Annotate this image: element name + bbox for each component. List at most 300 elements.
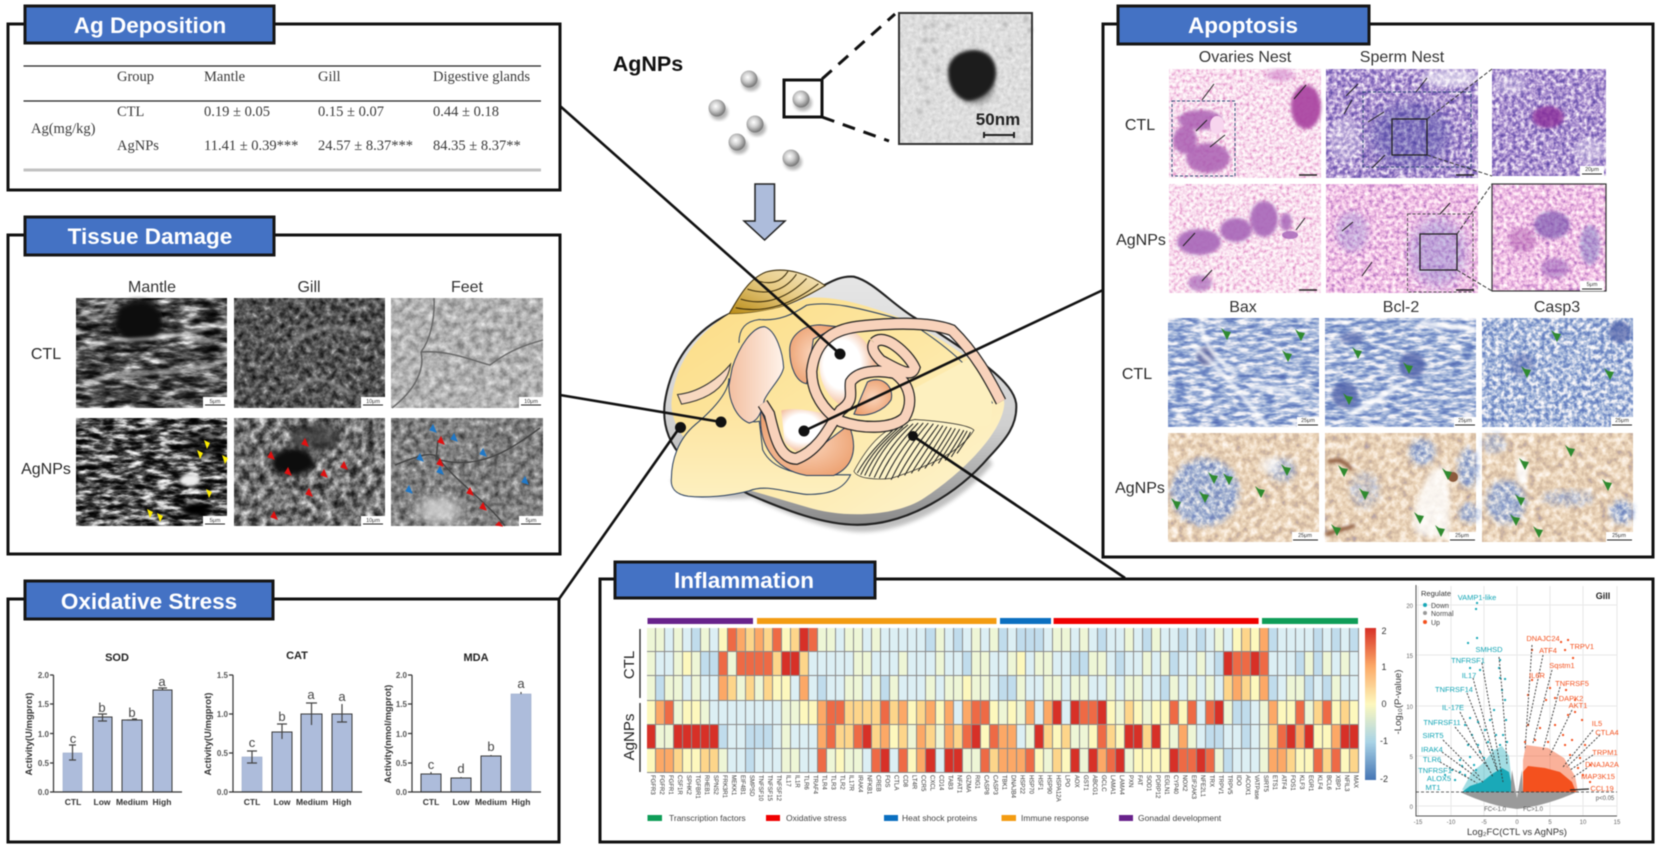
SEM: Gill AgNPs [234,418,385,526]
bar chart: SOD: c [70,731,77,746]
heatmap colour bar: 0 [1381,699,1387,709]
bar chart: CAT [203,650,362,807]
SEM: Mantle AgNPs [76,418,228,526]
bar chart: SOD: Low [94,797,111,807]
heatmap gene labels: TRPV1 [1217,775,1223,794]
magnify lines CTL [1427,69,1492,176]
heatmap gene labels: ACOX1 [1244,775,1250,795]
heatmap gene labels: NFKB1 [865,775,871,794]
down arrow [744,184,785,240]
heatmap gene labels: FOS [883,775,889,787]
heatmap gene labels: FGFR2 [658,775,664,795]
threshold lines [1416,791,1617,793]
table: 24.57 ± 8.37*** [318,138,413,154]
orange gene labels: DNAJC24 [1526,634,1560,643]
heatmap gene labels: LAMA1 [1109,775,1115,795]
volcano axis ticks: 15 [1614,820,1621,826]
heatmap gene labels: LT4R [910,775,916,789]
SEM: Feet CTL: 10μm [524,399,538,405]
orange gene labels: Sqstm1 [1549,661,1575,670]
bar chart: SOD: Medium [116,797,148,807]
heatmap gene labels: TRX [1208,775,1214,787]
volcano axis ticks: 15 [1406,654,1414,660]
gonad lobe right [854,380,892,415]
SEM: Feet CTL [391,298,543,408]
blue arrows feet [406,425,528,493]
volcano axis ticks: -15 [1414,820,1423,826]
heatmap gene labels: TRPV5 [1226,775,1232,794]
heatmap gene labels: KLF4 [1316,775,1322,789]
SEM: Gill AgNPs: 10μm [366,518,380,524]
bar chart: SOD: a [158,674,166,689]
bar chart: SOD: 1.5 [38,700,50,709]
teal gene labels: IL17 [1462,671,1476,680]
heatmap gene labels: HSP90 [1046,775,1052,794]
column titles [128,279,484,296]
heatmap gene labels: GST1 [1082,775,1088,791]
clam shadow [671,393,992,532]
bar chart: CAT: 1.0 [217,710,229,719]
heatmap gene labels: TNFSF15 [766,775,772,801]
volcano axes [1416,585,1617,816]
right mantle lobe [908,353,992,426]
heading: Oxidative Stress [25,581,273,619]
heatmap colour bar: -1 [1380,736,1388,746]
bar chart: SOD: Activity(U/mgprot) [24,693,35,775]
column titles: Feet [451,279,484,296]
H&E: sperm nest CTL [1326,69,1478,178]
orange gene labels: AKT1 [1569,701,1587,710]
volcano legend: Regulate [1421,589,1451,598]
heatmap gene labels: TLR6 [802,775,808,790]
heatmap gene labels: IL17R [847,775,853,791]
connector: Inflammation to gill [913,436,1125,578]
row labels [21,346,71,478]
heatmap gene labels: CASP8 [983,775,989,795]
orange gene labels: CTLA4 [1595,728,1619,737]
heatmap gene labels: SPHK2 [685,775,691,795]
SEM: Mantle AgNPs: 5μm [210,518,221,524]
heatmap gene labels: IRAK4 [856,775,862,792]
bar chart: SOD: 0.5 [38,759,50,768]
teal gene labels: IL-17E [1442,703,1464,712]
heatmap gene labels: RHEB1 [703,775,709,795]
heatmap row group labels [621,629,640,772]
heatmap gene labels: VATPase [1253,775,1259,799]
H&E: ovaries AgNPs [1169,184,1321,293]
panel: Inflammation [600,562,1653,842]
IHC column titles: Bcl-2 [1383,299,1419,316]
bar chart: SOD: 0.0 [38,788,50,797]
heatmap colour bar: 1 [1381,662,1387,672]
heatmap gene labels: MAX [1352,775,1358,788]
clam anatomy illustration [664,270,1016,532]
label leader lines [1440,645,1600,783]
bar chart: MDA: Medium [475,797,507,807]
IHC column titles: Casp3 [1534,299,1580,316]
table: 11.41 ± 0.39*** [204,138,298,154]
heatmap colour bar: -2 [1380,774,1388,784]
bar chart: SOD: 2.0 [38,671,50,680]
table: Mantle [204,69,245,85]
heatmap gene labels: TLR3 [829,775,835,790]
volcano legend: Up [1431,620,1440,627]
heatmap gene labels: TBK1 [1001,775,1007,790]
heatmap gene labels: TLR4 [820,775,826,790]
table [24,66,541,170]
IHC: Casp3 CTL [1482,318,1633,427]
heatmap gene labels: CD14 [938,775,944,790]
bar chart: CAT: c [249,735,256,750]
heading: Ag Deposition: Ag Deposition [74,13,226,38]
bar chart: MDA: Low [452,797,470,807]
red arrows feet [437,437,502,526]
heatmap gene labels: TNFSF12 [775,775,781,801]
heatmap gene labels: TGFBR1 [694,775,700,799]
leader solid [1570,789,1589,790]
column titles: Mantle [128,279,176,296]
heatmap gene labels: CASP3 [992,775,998,795]
teal gene labels: IRAK4 [1421,745,1443,754]
bar chart: MDA: c [428,757,435,772]
SEM: Mantle CTL [76,298,227,408]
bar chart: SOD [24,652,182,807]
table: Gill [318,69,341,85]
panel: Tissue Damage [8,217,560,554]
table: 0.15 ± 0.07 [318,104,384,120]
teal gene labels: TNFRSF1 [1418,766,1452,775]
heatmap gene labels: EGLN1 [1163,775,1169,795]
row labels: AgNPs [21,461,71,478]
heatmap gene labels: NOX2 [1181,775,1187,791]
heading: Oxidative Stress: Oxidative Stress [61,589,237,614]
heading: Inflammation: Inflammation [674,568,814,593]
heatmap gene labels: MEKK1 [730,775,736,795]
teal gene labels: SMHSD [1475,645,1503,654]
bar chart: CAT: 0.5 [217,749,229,758]
bar chart: CAT: Low [274,797,291,807]
heatmap gene labels: FGFR3 [649,775,655,795]
lower gland [761,411,854,476]
volcano threshold notes: p<0.05 [1596,796,1615,802]
heatmap gene labels: CYP40 [1172,775,1178,794]
IHC: Casp3 AgNPs: 25μm [1612,533,1626,539]
heatmap gene labels: PDRP12 [1154,775,1160,798]
IHC: Bcl-2 CTL [1325,318,1476,427]
bar chart: MDA: 0.0 [396,788,408,797]
heatmap gene labels: HSF1 [1037,775,1043,790]
bar chart: MDA: 2.0 [396,671,408,680]
heatmap gene labels: FOS1 [1289,775,1295,791]
histology row labels: CTL [1125,117,1155,134]
heading: Apoptosis [1118,6,1369,44]
orange dense points [1523,766,1576,792]
connector: Tissue Damage to foot [560,395,721,422]
row labels: CTL [31,346,61,363]
histology column titles: Sperm Nest [1360,49,1445,66]
shell [664,277,1016,525]
heatmap gene labels: EIF2AK3 [1190,775,1196,799]
SEM: Gill CTL [234,298,385,408]
heatmap [647,628,1359,773]
mantle [671,297,1004,514]
bar chart: SOD: b [128,705,136,720]
heatmap colour bar: 2 [1381,626,1387,636]
AgNPs label: AgNPs [613,52,683,76]
heatmap gene labels: XBP1 [1334,775,1340,790]
bar chart: SOD: 1.0 [38,730,50,739]
panel: Ag Deposition [8,6,560,190]
heatmap gene labels: CTLA [892,775,898,790]
bar chart: MDA: a [517,676,525,691]
heatmap gene labels: EGR1 [1307,775,1313,791]
heatmap gene labels: CXCL [928,775,934,791]
bar chart: CAT: a [307,687,315,702]
heatmap category bars [648,618,1358,624]
bar chart: CAT: CAT [286,650,308,662]
bar chart: MDA: d [457,761,465,776]
orange gene labels: IL6R [1529,671,1546,680]
teal dense points [1462,768,1511,792]
orange sparse points [1525,640,1590,782]
visceral outline [695,304,992,425]
orange gene labels [1526,634,1619,793]
heatmap legend: Oxidative stress [786,813,846,823]
heatmap gene labels: LPO [1064,775,1070,787]
orange gene labels: DNAJA2A [1585,760,1619,769]
volcano threshold notes: FC<-1.0 [1484,807,1507,813]
volcano axis ticks: 5 [1548,820,1552,826]
bar chart: SOD: b [98,700,106,715]
volcano axis ticks [1406,604,1621,826]
H&E: ovaries CTL [1169,69,1321,178]
IHC: Bcl-2 AgNPs: 25μm [1455,533,1469,539]
heading: Ag Deposition [25,6,274,43]
heatmap gene labels: PXN [1127,775,1133,787]
volcano axis ticks: 0 [1515,820,1519,826]
red arrows [268,439,347,519]
table: 0.19 ± 0.05 [204,104,270,120]
green arrowheads [1171,328,1614,538]
teal gene labels: ALOX5 [1427,774,1451,783]
volcano axis titles: -Log₁₀(P-value) [1393,670,1404,734]
table: Group [117,69,154,85]
orange semi-dense points [1523,745,1578,792]
TEM micrograph inset: 50nm [976,110,1020,129]
IHC column titles: Bax [1229,299,1257,316]
bar chart: CAT: CTL [244,797,260,807]
anatomy marker dots [675,348,918,441]
teal gene labels [1418,593,1503,792]
connector: Apoptosis to gonad [804,290,1103,431]
teal gene labels: TLR6 [1423,755,1441,764]
labial palp [729,327,784,423]
heading: Apoptosis: Apoptosis [1188,13,1298,38]
heatmap legend: Transcription factors [669,813,746,823]
bar chart: CAT: Activity(U/mgprot) [203,693,214,775]
heatmap gene labels: KLF3 [1298,775,1304,789]
heatmap gene labels: TAB3 [947,775,953,790]
heatmap row group labels: AgNPs [621,714,638,760]
bar chart: CAT: 0.0 [217,788,229,797]
heatmap gene labels: EIF4B1 [739,775,745,795]
teal gene labels: TNFRSF14 [1435,685,1473,694]
heatmap colour bar [1365,626,1388,784]
heatmap gene labels: RIG1 [974,775,980,789]
table: AgNPs [117,138,159,154]
heatmap legend: Heat shock proteins [902,813,977,823]
heatmap gene labels: CSF1R [676,775,682,795]
volcano threshold notes: FC>1.0 [1523,807,1544,813]
heatmap row group labels: CTL [621,651,638,679]
IHC: Bcl-2 CTL: 25μm [1458,418,1472,424]
heading: Tissue Damage [25,217,274,255]
heatmap legend: Gonadal development [1138,813,1222,823]
heatmap gene labels [647,775,1367,809]
panel: Oxidative Stress [8,581,559,842]
heading: Inflammation [615,562,875,598]
teal semi-dense points [1462,746,1511,792]
IHC: Bax CTL [1168,318,1319,427]
heatmap gene labels: CREB [874,775,880,792]
table: 0.44 ± 0.18 [433,104,499,120]
siphon strip [677,364,731,404]
gonad lower [781,409,834,452]
heatmap gene labels: CCR5 [919,775,925,791]
teal gene labels: MT1 [1426,783,1440,792]
grey points [1460,770,1577,809]
heading: Tissue Damage: Tissue Damage [68,224,232,249]
TEM micrograph inset [899,13,1032,144]
SEM: Gill CTL: 10μm [366,399,380,405]
H&E: sperm nest AgNPs [1326,184,1478,293]
bar chart: CAT: b [278,709,286,724]
heatmap gene labels: FGFR1 [667,775,673,795]
digestive gland [790,325,837,384]
bar chart: SOD: High [153,797,171,807]
IHC row labels [1115,366,1165,497]
H&E: sperm nest CTL magnified [1492,69,1606,176]
bar chart: MDA: 1.0 [396,730,408,739]
volcano grid [1416,586,1617,816]
bar chart: MDA: MDA [463,652,489,664]
teal gene labels: TNFRSF11 [1423,718,1461,727]
heatmap gene labels: NFIL3 [1343,775,1349,791]
bar chart: CAT: 1.5 [217,671,229,680]
bar chart: SOD: CTL [65,797,81,807]
heatmap gene labels: NFE2L1 [1199,775,1205,797]
heatmap gene labels: ETS1 [1271,775,1277,790]
heatmap gene labels: HSP70 [1028,775,1034,794]
magnify lines AgNPs [1457,184,1492,291]
heatmap legend: Immune response [1021,813,1089,823]
orange gene labels: IL5 [1592,719,1602,728]
volcano axis ticks: -5 [1481,820,1487,826]
heatmap gene labels: GCLC [1100,775,1106,792]
orange gene labels: ATF4 [1539,646,1557,655]
H&E: sperm nest AgNPs magnified: 5μm [1587,282,1598,288]
volcano legend: Normal [1431,611,1454,618]
volcano tissue label: Gill [1596,591,1610,601]
orange gene labels: MAP3K15 [1581,772,1615,781]
nanoparticles [708,70,812,170]
volcano threshold notes [1484,796,1615,813]
IHC: Casp3 CTL: 25μm [1615,418,1629,424]
IHC column titles [1229,299,1580,316]
connector: Oxidative Stress to mantle edge [559,427,680,599]
teal gene labels: VAMP1-like [1458,593,1496,602]
IHC: Bax CTL: 25μm [1301,418,1315,424]
volcano legend [1421,589,1454,627]
panel: Apoptosis [1103,6,1653,557]
teal sparse points [1445,603,1507,780]
bar chart: SOD: SOD [105,652,129,664]
volcano axis ticks: 10 [1406,705,1414,711]
table: CTL [117,104,144,120]
heatmap gene labels: DNAJB4 [1010,775,1016,798]
SEM: Mantle CTL: 5μm [210,399,221,405]
IHC row labels: CTL [1122,366,1152,383]
volcano axis ticks: -10 [1447,820,1456,826]
heatmap gene labels: FAT [1136,775,1142,786]
volcano axis titles: Log₂FC(CTL vs AgNPs) [1467,827,1567,838]
H&E: sperm nest CTL magnified: 20μm [1585,167,1599,173]
SEM: Feet AgNPs: 5μm [526,518,537,524]
table: Ag(mg/kg) [31,121,96,137]
bar chart: CAT: a [338,689,346,704]
histology column titles: Ovaries Nest [1199,49,1292,66]
heatmap gene labels: TNFSF10 [757,775,763,801]
volcano legend: Down [1431,603,1449,610]
heatmap gene labels: HSPA12A [1055,775,1061,802]
H&E: sperm nest AgNPs magnified [1492,184,1606,291]
gills [854,419,974,480]
heatmap gene labels: CD8 [901,775,907,787]
column titles: Gill [297,279,321,296]
connector: Ag Deposition to gonad [560,106,840,354]
intestine tube fill [763,324,1001,459]
heatmap gene labels: SOD1 [1145,775,1151,791]
IHC row labels: AgNPs [1115,480,1165,497]
heatmap gene labels: SMPSD [748,775,754,796]
heatmap gene labels: IL1R [793,775,799,788]
volcano axis ticks: 20 [1406,604,1414,610]
bar chart: CAT: High [333,797,351,807]
intestine tube outline [763,324,1001,459]
heatmap gene labels: IDO [1235,775,1241,786]
IHC: Casp3 AgNPs [1482,433,1634,542]
orange gene labels: TNFRSF5 [1555,679,1589,688]
heatmap gene labels: ATF4 [1280,775,1286,789]
teal gene labels: SIRT5 [1422,731,1444,740]
heatmap gene labels: FRK3R1 [721,775,727,798]
histology row labels [1116,117,1166,249]
zoom box around particle [784,80,822,117]
heatmap gene labels: AOX [1073,775,1079,788]
bar chart: MDA: 1.5 [396,700,408,709]
bar chart: MDA: 0.5 [396,759,408,768]
heatmap gene labels: LAMA4 [1118,775,1124,795]
IHC: Bax AgNPs [1168,433,1319,542]
gonad upper [819,331,876,405]
IHC: Bcl-2 AgNPs [1325,433,1479,542]
volcano axis ticks: 5 [1410,755,1414,761]
table: 84.35 ± 8.37** [433,138,521,154]
heatmap legend [648,813,1222,823]
teal gene labels: TNFRSF1 [1451,656,1485,665]
bar chart: MDA: b [487,739,495,754]
table: Digestive glands [433,69,530,85]
